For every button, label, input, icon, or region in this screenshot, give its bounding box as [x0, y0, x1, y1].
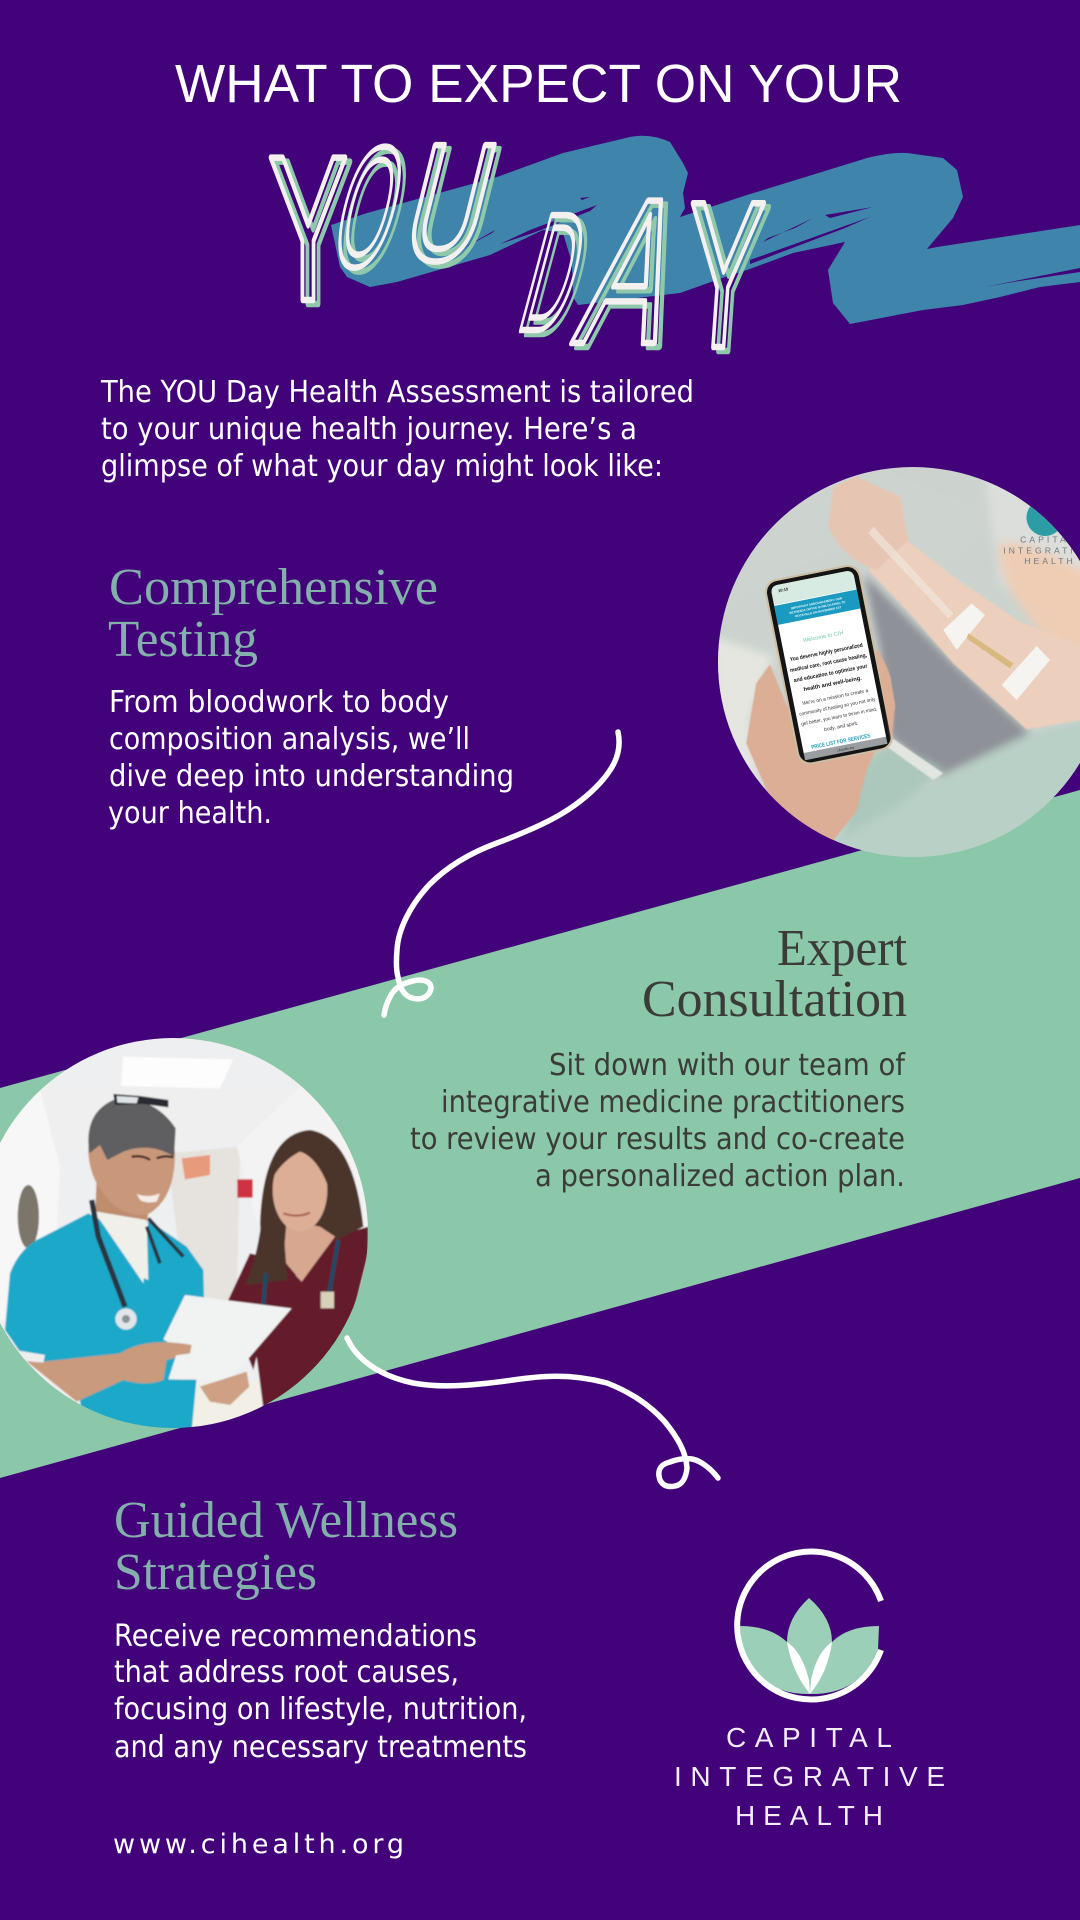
hand lettered title: YOU DAY: Y — [677, 158, 770, 392]
icon: lotus in circle — [737, 1552, 881, 1700]
phone: BETHESDA OFFICE IS RELOCATING TO — [789, 600, 846, 615]
intro text — [100, 375, 694, 484]
body: expert consultation: integrative medicine practitioners — [441, 1085, 905, 1120]
phone: 10:10 — [778, 586, 789, 593]
logo wordmark: INTEGRATIVE — [674, 1761, 945, 1792]
phone: medical care, root cause healing, — [790, 653, 868, 674]
logo wordmark: HEALTH — [735, 1800, 883, 1831]
phone: We're on a mission to create a — [802, 688, 869, 707]
hand lettered title: YOU DAY: D — [510, 183, 608, 370]
hand lettered title: YOU DAY: Y — [273, 117, 353, 348]
body: expert consultation: to review your results and co-create — [410, 1122, 905, 1157]
photo: two practitioners reviewing document — [0, 1033, 377, 1433]
photo: patient with IV holding phone — [718, 467, 1080, 857]
body: expert consultation — [410, 1048, 906, 1194]
phone: community of healing so you not only — [799, 697, 876, 718]
body: expert consultation: Sit down with our team of — [549, 1048, 906, 1083]
body: comprehensive testing: From bloodwork to body — [109, 685, 449, 720]
website url: www.cihealth.org — [113, 1829, 404, 1860]
man — [94, 1182, 149, 1224]
heading: guided wellness strategies — [114, 1492, 458, 1601]
body: guided wellness strategies: focusing on lifestyle, nutrition, — [114, 1692, 527, 1727]
hand lettered title: YOU DAY — [268, 110, 775, 396]
brush stroke — [331, 136, 1080, 324]
watermark logo: CAPITAL — [1020, 535, 1077, 545]
body: expert consultation: a personalized action plan. — [535, 1159, 905, 1194]
hand lettered title: YOU DAY: Y — [268, 113, 348, 344]
title: WHAT TO EXPECT ON YOUR — [175, 54, 902, 114]
logo: capital integrative health — [674, 1552, 945, 1831]
section: expert consultation — [410, 920, 908, 1194]
phone: and education to optimize your — [793, 663, 869, 684]
heading: comprehensive testing: Comprehensive — [109, 559, 438, 616]
heading: guided wellness strategies: Guided Wellness — [114, 1492, 458, 1549]
heading: comprehensive testing — [108, 559, 438, 668]
paper — [163, 1295, 292, 1380]
intro text: glimpse of what your day might look like: — [101, 449, 663, 484]
woman — [259, 1129, 364, 1276]
phone: get better, you learn to thrive in mind, — [801, 707, 878, 728]
phone: IMPORTANT ANNOUNCEMENT: OUR — [791, 596, 843, 610]
body: comprehensive testing: dive deep into understanding — [109, 759, 514, 794]
phone: PRICE LIST FOR SERVICES — [811, 733, 871, 751]
hand lettered title: YOU DAY: U — [394, 114, 516, 300]
intro text: The YOU Day Health Assessment is tailored — [100, 375, 694, 410]
phone: ROCKVILLE ON NOVEMBER 1ST — [795, 605, 842, 618]
hand lettered title: YOU DAY: A — [563, 161, 714, 392]
heading: guided wellness strategies: Strategies — [114, 1544, 317, 1601]
hand lettered title: YOU DAY: Y — [682, 162, 775, 396]
heading: expert consultation: Consultation — [642, 971, 907, 1028]
section: comprehensive testing — [108, 559, 514, 831]
intro text: to your unique health journey. Here’s a — [101, 412, 637, 447]
body: comprehensive testing: your health. — [108, 796, 272, 831]
curved arrow 2 — [347, 1338, 718, 1487]
body: guided wellness strategies: Receive recommendations — [114, 1619, 477, 1654]
phone: Welcome to CIH — [803, 630, 844, 644]
body: comprehensive testing: composition analysis, we’ll — [109, 722, 470, 757]
logo wordmark — [674, 1722, 945, 1831]
phone: health and well-being. — [803, 676, 863, 693]
heading: expert consultation — [642, 920, 908, 1028]
body: guided wellness strategies: and any necessary treatments — [114, 1730, 527, 1765]
heading: expert consultation: Expert — [777, 920, 908, 977]
body: comprehensive testing — [108, 685, 514, 831]
phone: cihealth.org — [837, 745, 855, 753]
hand lettered title: YOU DAY: U — [389, 110, 511, 296]
watermark logo — [1004, 506, 1072, 564]
body: guided wellness strategies: that address root causes, — [114, 1655, 459, 1690]
hand lettered title: YOU DAY: A — [558, 157, 709, 388]
phone: body, and spirit. — [824, 720, 859, 733]
body: guided wellness strategies — [114, 1619, 527, 1765]
watermark logo: HEALTH — [1024, 556, 1076, 566]
section: guided wellness strategies — [114, 1492, 527, 1765]
hand lettered title: YOU DAY: D — [505, 179, 603, 366]
phone — [763, 563, 895, 767]
hand lettered title: YOU DAY: O — [323, 115, 427, 307]
logo wordmark: CAPITAL — [726, 1722, 892, 1753]
heading: comprehensive testing: Testing — [108, 611, 258, 668]
curved arrow 1 — [384, 732, 619, 1015]
phone: You deserve highly personalized — [790, 643, 864, 663]
mint diagonal band — [0, 790, 1080, 1478]
hand lettered title: YOU DAY: O — [318, 111, 422, 303]
